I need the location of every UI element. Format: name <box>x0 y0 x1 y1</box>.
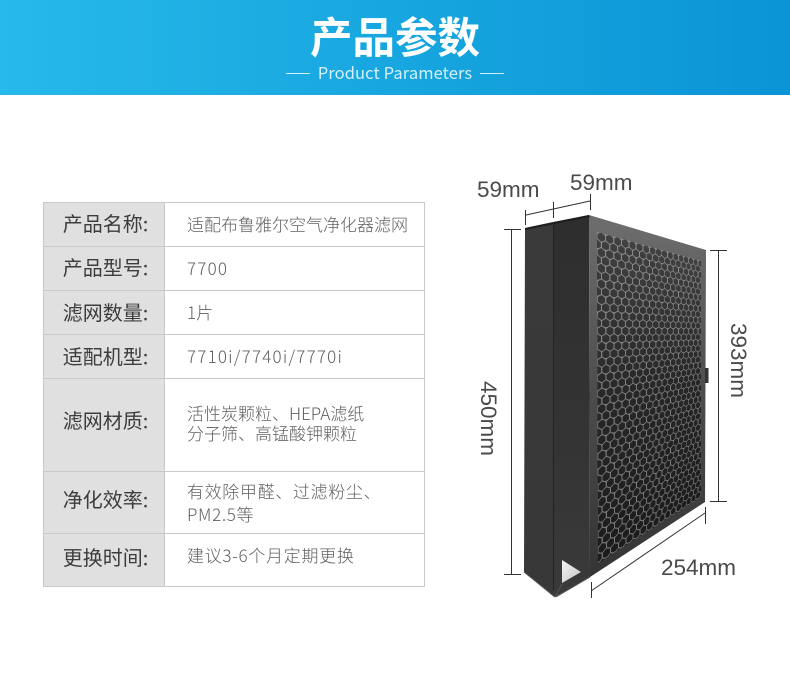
filter white triangle opening <box>562 560 581 583</box>
parameter table <box>43 202 425 587</box>
dimension: height 450mm: 450mm <box>476 381 501 456</box>
row: compatible models: 适配机型: <box>63 341 148 370</box>
row: replacement time: 更换时间: <box>63 542 148 570</box>
row: purification efficiency <box>44 472 424 534</box>
filter side latch <box>705 368 708 383</box>
filter top edge <box>525 215 590 230</box>
row: compatible models <box>44 335 424 379</box>
row: model <box>44 247 424 291</box>
filter side panel seam <box>553 222 554 590</box>
row: purification efficiency: PM2.5等 <box>187 500 254 526</box>
row: compatible models: 7710i/7740i/7770i <box>187 342 343 368</box>
filter: product illustration <box>524 215 708 597</box>
filter front frame <box>589 215 706 577</box>
subtitle: Product Parameters <box>318 60 472 84</box>
row: filter quantity: 1片 <box>187 298 213 324</box>
dimension: top left 59mm <box>477 177 590 225</box>
row: filter material: 活性炭颗粒、HEPA滤纸 <box>187 400 364 424</box>
row: replacement time <box>44 534 355 586</box>
row: product name <box>44 203 424 247</box>
dimension: top left 59mm: 59mm <box>477 177 540 202</box>
dimension: height 393mm <box>710 250 751 502</box>
title: 产品参数 <box>310 5 480 66</box>
dimension: height 450mm <box>476 229 521 574</box>
row: model: 产品型号: <box>63 252 148 281</box>
filter middle side panel <box>553 215 590 597</box>
header banner <box>0 0 790 95</box>
row: filter quantity: 滤网数量: <box>63 297 148 326</box>
dimension: width 254mm: 254mm <box>661 555 736 580</box>
row: filter material: 分子筛、高锰酸钾颗粒 <box>187 420 357 444</box>
row: product name: 适配布鲁雅尔空气净化器滤网 <box>187 210 408 236</box>
filter bottom corner crease <box>524 572 590 597</box>
dimension: top right 59mm: 59mm <box>570 170 633 195</box>
row: filter quantity <box>44 291 424 335</box>
row: filter material <box>44 379 424 472</box>
row: purification efficiency: 有效除甲醛、过滤粉尘、 <box>187 478 381 502</box>
dimension: height 393mm: 393mm <box>726 323 751 398</box>
row: purification efficiency: 净化效率: <box>63 484 148 513</box>
row: filter material: 滤网材质: <box>63 405 148 434</box>
row: model: 7700 <box>187 254 228 280</box>
dimension: width 254mm <box>591 507 736 598</box>
filter honeycomb mesh <box>597 232 701 563</box>
filter left side panel <box>524 222 554 597</box>
dimension: top right 59mm <box>570 170 633 210</box>
row: product name: 产品名称: <box>63 208 148 237</box>
row: replacement time: 建议3-6个月定期更换 <box>187 542 355 567</box>
